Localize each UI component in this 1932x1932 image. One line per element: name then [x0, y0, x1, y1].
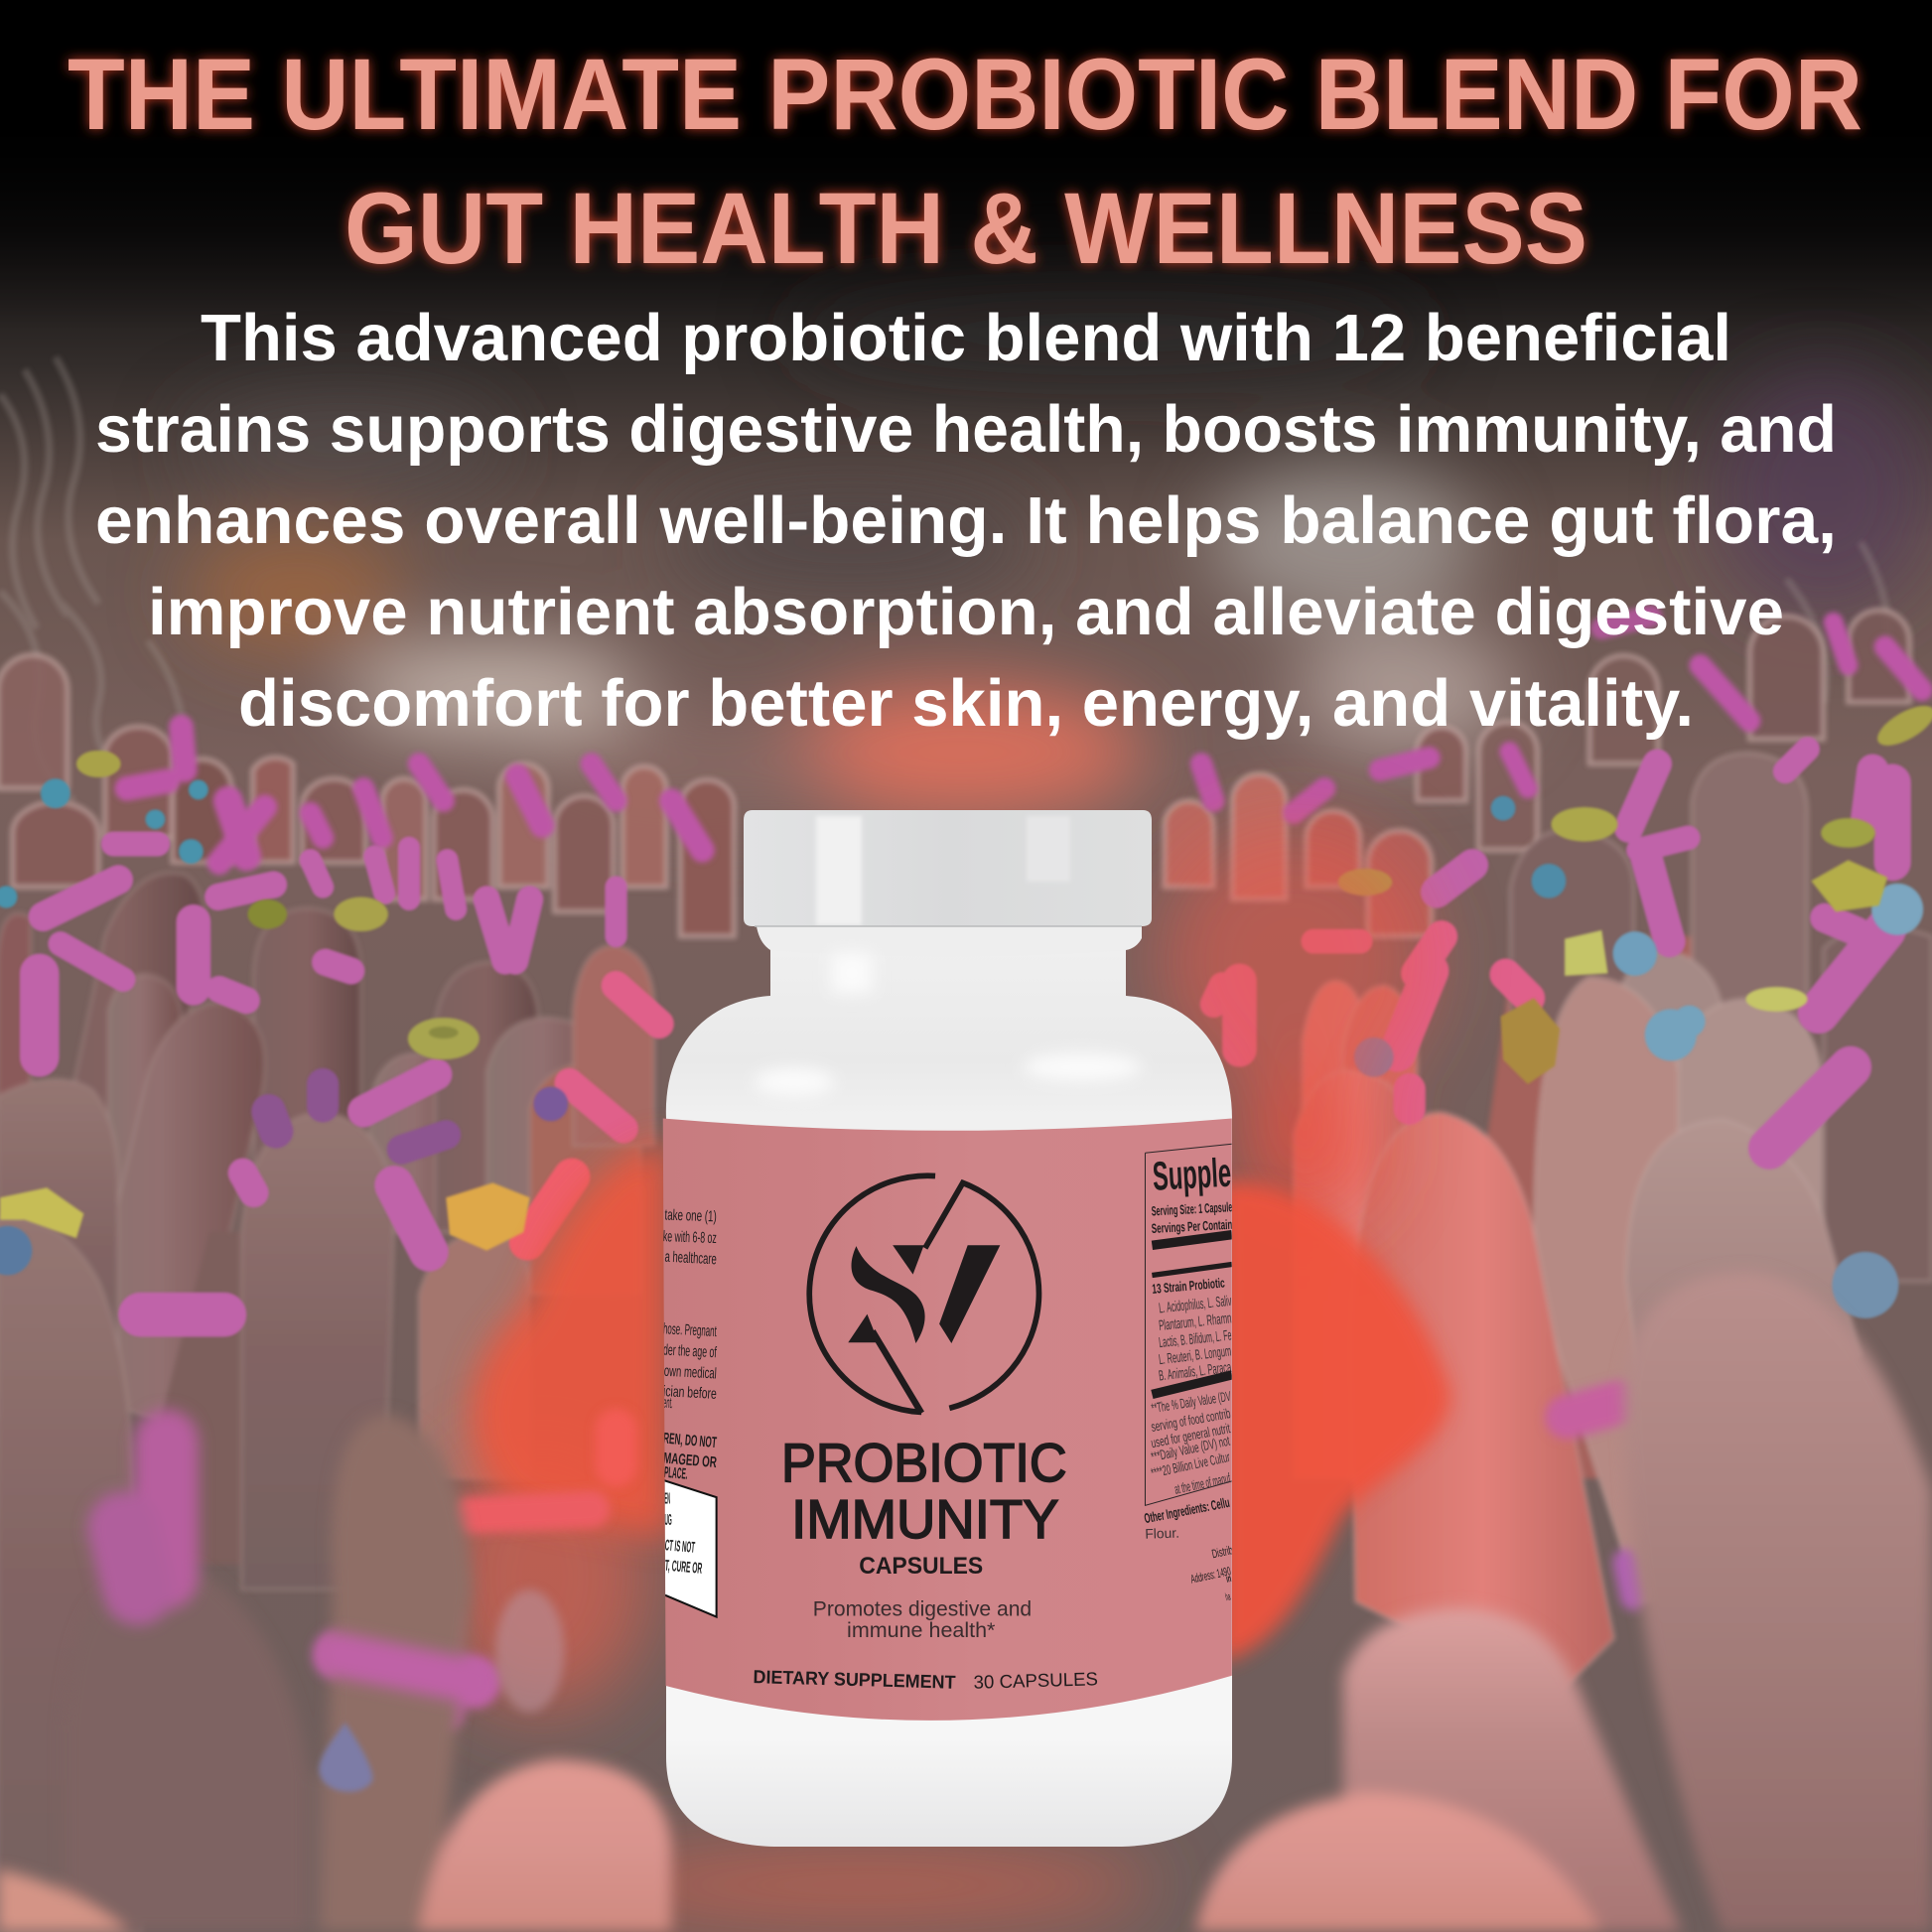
tagline: immune health* [847, 1619, 995, 1642]
background: water drop bacterium [319, 1723, 372, 1792]
supplement facts panel: Plantarum, L. Rhamn [1158, 1311, 1232, 1334]
background: blue bacteria [0, 778, 1923, 1318]
supplement facts panel: L. Reuteri, B. Longum [1158, 1343, 1232, 1368]
title: GUT HEALTH & WELLNESS [345, 172, 1587, 285]
tagline: Promotes digestive and [813, 1597, 1032, 1620]
supplement facts panel: used for general nutrit [1150, 1420, 1231, 1450]
supplement facts panel: Supple [1152, 1150, 1232, 1199]
intro paragraph: improve nutrient absorption, and alleviate digestive [148, 575, 1784, 649]
background: lumen light glow [185, 290, 1932, 819]
supplement facts panel [1143, 1144, 1234, 1603]
supplement facts panel: in [1225, 1573, 1232, 1586]
product name [784, 1443, 1066, 1574]
bottle neck lip [757, 926, 1142, 957]
supplement facts panel: L. Acidophilus, L. Saliv [1158, 1294, 1233, 1316]
directions side panel: hose. Pregnant [663, 1320, 718, 1340]
directions side panel: take one (1) [664, 1207, 717, 1225]
directions side panel: own medical [663, 1363, 717, 1382]
warning box: CT IS NOT [664, 1537, 696, 1557]
supplement facts panel: Other Ingredients: Cellu [1143, 1494, 1231, 1526]
intro paragraph: This advanced probiotic blend with 12 beneficial [201, 301, 1731, 375]
supplement facts panel: 13 Strain Probiotic [1152, 1275, 1226, 1297]
background: red inflammation glow [431, 825, 1450, 1928]
intro paragraph: discomfort for better skin, energy, and vitality. [238, 666, 1694, 741]
intro paragraph: enhances overall well-being. It helps balance gut flora, [95, 483, 1837, 558]
background: near rods [40, 750, 1892, 1314]
supplement facts panel: at the time of manuf [1173, 1469, 1232, 1497]
background: foreground blurred villi [0, 1272, 1932, 1932]
supplement facts panel: Address: 1490 [1189, 1564, 1232, 1587]
directions side panel: ent. [662, 1395, 673, 1412]
bottle body [666, 933, 1232, 1847]
directions side panel: a healthcare [664, 1249, 717, 1268]
background: soft rods over villi [123, 1442, 475, 1682]
dietary supplement line: DIETARY SUPPLEMENT [753, 1666, 956, 1693]
background: far bacteria cluster [127, 616, 1922, 863]
directions side panel: ke with 6-8 oz [663, 1228, 717, 1247]
bottle highlights [755, 953, 1142, 1096]
supplement facts panel: Serving Size: 1 Capsule [1151, 1199, 1233, 1218]
bottle label [662, 1119, 1234, 1721]
background: mucosal fold lines [0, 357, 1888, 801]
directions side panel: REN, DO NOT [662, 1431, 718, 1451]
background: translucent villus [495, 1589, 564, 1713]
supplement facts panel: Servings Per Contain [1151, 1217, 1233, 1236]
supplement facts panel: **The % Daily Value (DV [1150, 1388, 1232, 1416]
bottle cap [744, 810, 1152, 926]
supplement bottle [662, 810, 1234, 1847]
warning box: UG [664, 1512, 672, 1529]
background: blurred rods [339, 1402, 1634, 1713]
title [68, 38, 1863, 285]
background: yellow bacteria [0, 698, 1932, 1251]
warning box: T, CURE OR [664, 1558, 703, 1578]
text: Lactis, B. Bifidum, L. Fe [1158, 1328, 1232, 1351]
product name: PROBIOTIC [781, 1432, 1067, 1493]
directions side panel: PLACE. [663, 1464, 688, 1483]
dietary supplement line: 30 CAPSULES [973, 1668, 1098, 1693]
supplement facts panel: Flour. [1145, 1525, 1179, 1542]
supplement facts panel: Distrib [1210, 1543, 1234, 1561]
background: mid villi left [0, 873, 654, 1932]
tagline [814, 1600, 1031, 1637]
directions side panel [662, 1207, 718, 1483]
intro paragraph [95, 301, 1837, 741]
product name: IMMUNITY [791, 1488, 1059, 1550]
directions side panel: der the age of [663, 1342, 718, 1361]
background: top dark fade [0, 0, 1932, 328]
background: far villi row arcs [0, 610, 1910, 936]
product name: CAPSULES [859, 1554, 983, 1580]
supplement facts panel: ***Daily Value (DV) not [1150, 1433, 1231, 1464]
directions side panel: MAGED OR [662, 1450, 718, 1471]
background: mid villi right [1294, 753, 1932, 1701]
supplement facts panel: B. Animalis, L. Paraca [1158, 1360, 1233, 1385]
supplement facts panel: ha [1224, 1590, 1232, 1603]
logo [809, 1175, 1038, 1413]
warning box [664, 1480, 717, 1617]
supplement facts panel: ****20 Billion Live Cultur [1150, 1449, 1231, 1481]
dietary supplement line [755, 1670, 1098, 1689]
intro paragraph: strains supports digestive health, boosts immunity, and [95, 392, 1837, 467]
warning box: EN [664, 1490, 670, 1507]
directions side panel: ician before [663, 1383, 717, 1403]
supplement facts panel: serving of food contrib [1150, 1405, 1232, 1435]
